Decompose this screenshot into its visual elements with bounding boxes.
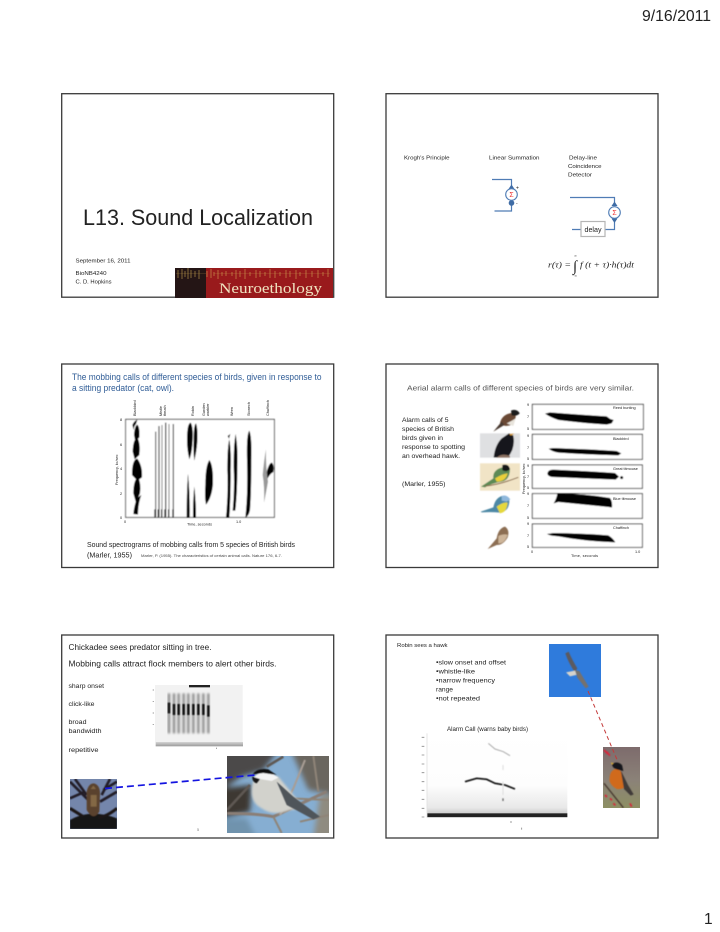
- column headings: Krogh's Principle: [404, 156, 450, 162]
- chart: alarm call spectrograms: 0: [531, 550, 533, 554]
- bird: chaffinch: [488, 527, 508, 549]
- chart: alarm call spectrograms: Chaffinch: [613, 526, 629, 530]
- species labels: 1.0: [236, 520, 241, 524]
- species labels: 8: [120, 418, 122, 422]
- formula: cross-correlation: r(τ) =: [548, 260, 571, 270]
- formula: cross-correlation: −∞: [572, 273, 577, 278]
- column headings: Detector: [568, 172, 592, 178]
- chart: alarm call spectrograms: 7: [527, 415, 529, 419]
- formula: cross-correlation: f (t + τ)·h(τ)dt: [580, 260, 635, 270]
- text block: chickadee description: [68, 643, 276, 668]
- text block: alarm calls description: response to spotting: [402, 444, 465, 451]
- chart: alarm call spectrograms: [522, 403, 643, 558]
- chart: alarm call spectrograms: Great titmouse: [613, 467, 638, 471]
- column headings: Coincidence: [568, 164, 602, 170]
- species labels: Chaffinch: [266, 400, 270, 416]
- banner: Neuroethology: [175, 268, 333, 298]
- panel: slide 1 title: [62, 94, 334, 298]
- text block: chickadee description: Mobbing calls attract flock members to alert other birds.: [68, 660, 276, 668]
- column headings: Linear Summation: [489, 156, 540, 162]
- species labels: Frequency, kc/sec: [115, 454, 119, 485]
- chart: alarm call spectrograms: Blackbird: [613, 437, 629, 441]
- formula: cross-correlation: ∞: [574, 253, 577, 258]
- column headings: [404, 156, 602, 178]
- bird: blackbird: [480, 433, 520, 458]
- list: mobbing call traits: click-like: [68, 701, 95, 708]
- chart: alarm call spectrograms: Frequency, kc/sec: [522, 463, 526, 494]
- bird: reed bunting: [493, 410, 520, 432]
- diagram: linear summation: +: [516, 186, 519, 192]
- diagram: linear summation: [492, 180, 519, 211]
- chart: mobbing call spectrograms: [115, 400, 274, 526]
- heading: mobbing calls: a sitting predator (cat, owl).: [72, 383, 174, 393]
- species labels: Stonech: [247, 402, 251, 416]
- text block: date and course: BioNB4240: [76, 271, 106, 277]
- text block: chickadee description: Chickadee sees predator sitting in tree.: [68, 643, 212, 652]
- text block: date and course: September 16, 2011: [76, 258, 130, 264]
- page date: 9/16/2011: [642, 8, 711, 25]
- chart: alarm call spectrograms: Blue titmouse: [613, 497, 636, 501]
- page number: 1: [704, 911, 713, 928]
- species labels: [115, 400, 270, 526]
- text block: alarm calls description: birds given in: [402, 435, 443, 442]
- chart: alarm call spectrograms: 1.0: [635, 550, 640, 554]
- list: alarm call traits: •not repeated: [436, 696, 480, 702]
- text block: alarm calls description: (Marler, 1955): [402, 481, 446, 488]
- formula: cross-correlation: [548, 253, 635, 278]
- chart: alarm call spectrograms: 5: [527, 545, 529, 549]
- panel: slide 2 Krogh's principle and circuits: [386, 94, 658, 297]
- chart: alarm call spectrograms: 5: [527, 486, 529, 490]
- bird: blue tit: [481, 495, 510, 513]
- chart: alarm call spectrograms: 9: [527, 434, 529, 438]
- diagram: delay-line coincidence detector: delay: [584, 225, 602, 234]
- chart: alarm call spectrograms: Reed bunting: [613, 406, 636, 410]
- panel: slide 6 robin alarm call: [386, 635, 658, 838]
- list: alarm call traits: •whistle-like: [436, 668, 475, 676]
- list: alarm call traits: •slow onset and offset: [436, 660, 506, 666]
- column headings: Delay-line: [569, 156, 597, 162]
- caption: spectrogram source: [87, 540, 295, 560]
- chart: robin alarm call spectrogram: [422, 733, 567, 830]
- text block: alarm calls description: [402, 417, 465, 488]
- caption: spectrogram source: Marler, P. (1955). The characteristics of certain animal calls. Nature 176, 6-7.: [141, 554, 282, 558]
- chart: alarm call spectrograms: 7: [527, 475, 529, 479]
- list: mobbing call traits: broad: [68, 719, 87, 726]
- photo: owl: [70, 779, 117, 829]
- diagram: delay-line coincidence detector: Σ: [612, 210, 617, 217]
- chart: alarm call spectrograms: 7: [527, 504, 529, 508]
- chart: alarm call spectrograms: 5: [527, 427, 529, 431]
- arrow: red dashed link from hawk to robin: [588, 691, 618, 762]
- list: alarm call traits: [436, 660, 506, 702]
- bird: great tit: [480, 463, 520, 491]
- banner: Neuroethology: Neuroethology: [219, 281, 323, 297]
- heading: aerial alarm calls: Aerial alarm calls of different species of birds are very similar.: [407, 384, 634, 392]
- species labels: Garden: [202, 403, 206, 416]
- chart: alarm call spectrograms: 9: [527, 492, 529, 496]
- chart: alarm call spectrograms: 7: [527, 534, 529, 538]
- images: five bird species: [480, 410, 520, 549]
- chart: alarm call spectrograms: 7: [527, 446, 529, 450]
- list: mobbing call traits: repetitive: [68, 747, 99, 754]
- formula: cross-correlation: ∫: [572, 259, 579, 275]
- photo: hawk: [549, 644, 601, 697]
- list: alarm call traits: •narrow frequency: [436, 678, 496, 684]
- species labels: 0: [120, 516, 122, 520]
- text block: alarm calls description: an overhead hawk.: [402, 453, 460, 460]
- panel: slide 4 aerial alarm calls: [386, 364, 658, 568]
- chart title: Alarm Call (warns baby birds): [447, 726, 528, 733]
- chart: alarm call spectrograms: 9: [527, 522, 529, 526]
- list: mobbing call traits: bandwidth: [68, 728, 102, 735]
- list: mobbing call traits: [68, 683, 104, 754]
- caption: spectrogram source: (Marler, 1955): [87, 550, 132, 560]
- photo: chickadee: [227, 756, 329, 833]
- text block: alarm calls description: Alarm calls of 5: [402, 417, 449, 424]
- text block: date and course: [76, 258, 130, 286]
- species labels: Wren: [230, 407, 234, 416]
- panel: slide 3 mobbing calls: [62, 364, 334, 568]
- species labels: warbler: [206, 403, 210, 416]
- species labels: 6: [120, 443, 122, 447]
- list: alarm call traits: range: [436, 686, 453, 694]
- species labels: Mistle: [159, 406, 163, 416]
- arrow: blue dashed link from owl to chickadee: [105, 775, 256, 788]
- chart: alarm call spectrograms: Time, seconds: [571, 554, 598, 558]
- photo: robin: [603, 747, 640, 808]
- diagram: linear summation: Σ: [509, 192, 514, 199]
- heading: lecture title: L13. Sound Localization: [83, 205, 313, 230]
- chart: alarm call spectrograms: 9: [527, 403, 529, 407]
- chart: alarm call spectrograms: 5: [527, 457, 529, 461]
- species labels: 0: [124, 520, 126, 524]
- text block: date and course: C. D. Hopkins: [76, 280, 112, 286]
- heading: mobbing calls: [72, 372, 322, 393]
- diagram: delay-line coincidence detector: [570, 198, 620, 236]
- page marker: 5: [197, 828, 199, 832]
- species labels: Blackbird: [133, 400, 137, 416]
- caption: spectrogram source: Sound spectrograms of mobbing calls from 5 species of British birds: [87, 540, 295, 549]
- chart: alarm call spectrograms: 9: [527, 464, 529, 468]
- species labels: Time, seconds: [187, 522, 212, 526]
- chart: alarm call spectrograms: 5: [527, 516, 529, 520]
- text block: robin sees a hawk: Robin sees a hawk: [397, 643, 448, 649]
- species labels: Robin: [191, 406, 195, 416]
- species labels: 4: [120, 467, 122, 471]
- list: mobbing call traits: sharp onset: [68, 683, 104, 690]
- diagram: linear summation: -: [516, 201, 518, 207]
- text block: alarm calls description: species of British: [402, 426, 454, 433]
- chart: chickadee spectrogram: [153, 685, 243, 749]
- panel: slide 5 chickadee mobbing: [62, 635, 337, 838]
- species labels: thrush: [163, 405, 167, 416]
- species labels: 2: [120, 492, 122, 496]
- heading: mobbing calls: The mobbing calls of different species of birds, given in response to: [72, 372, 322, 382]
